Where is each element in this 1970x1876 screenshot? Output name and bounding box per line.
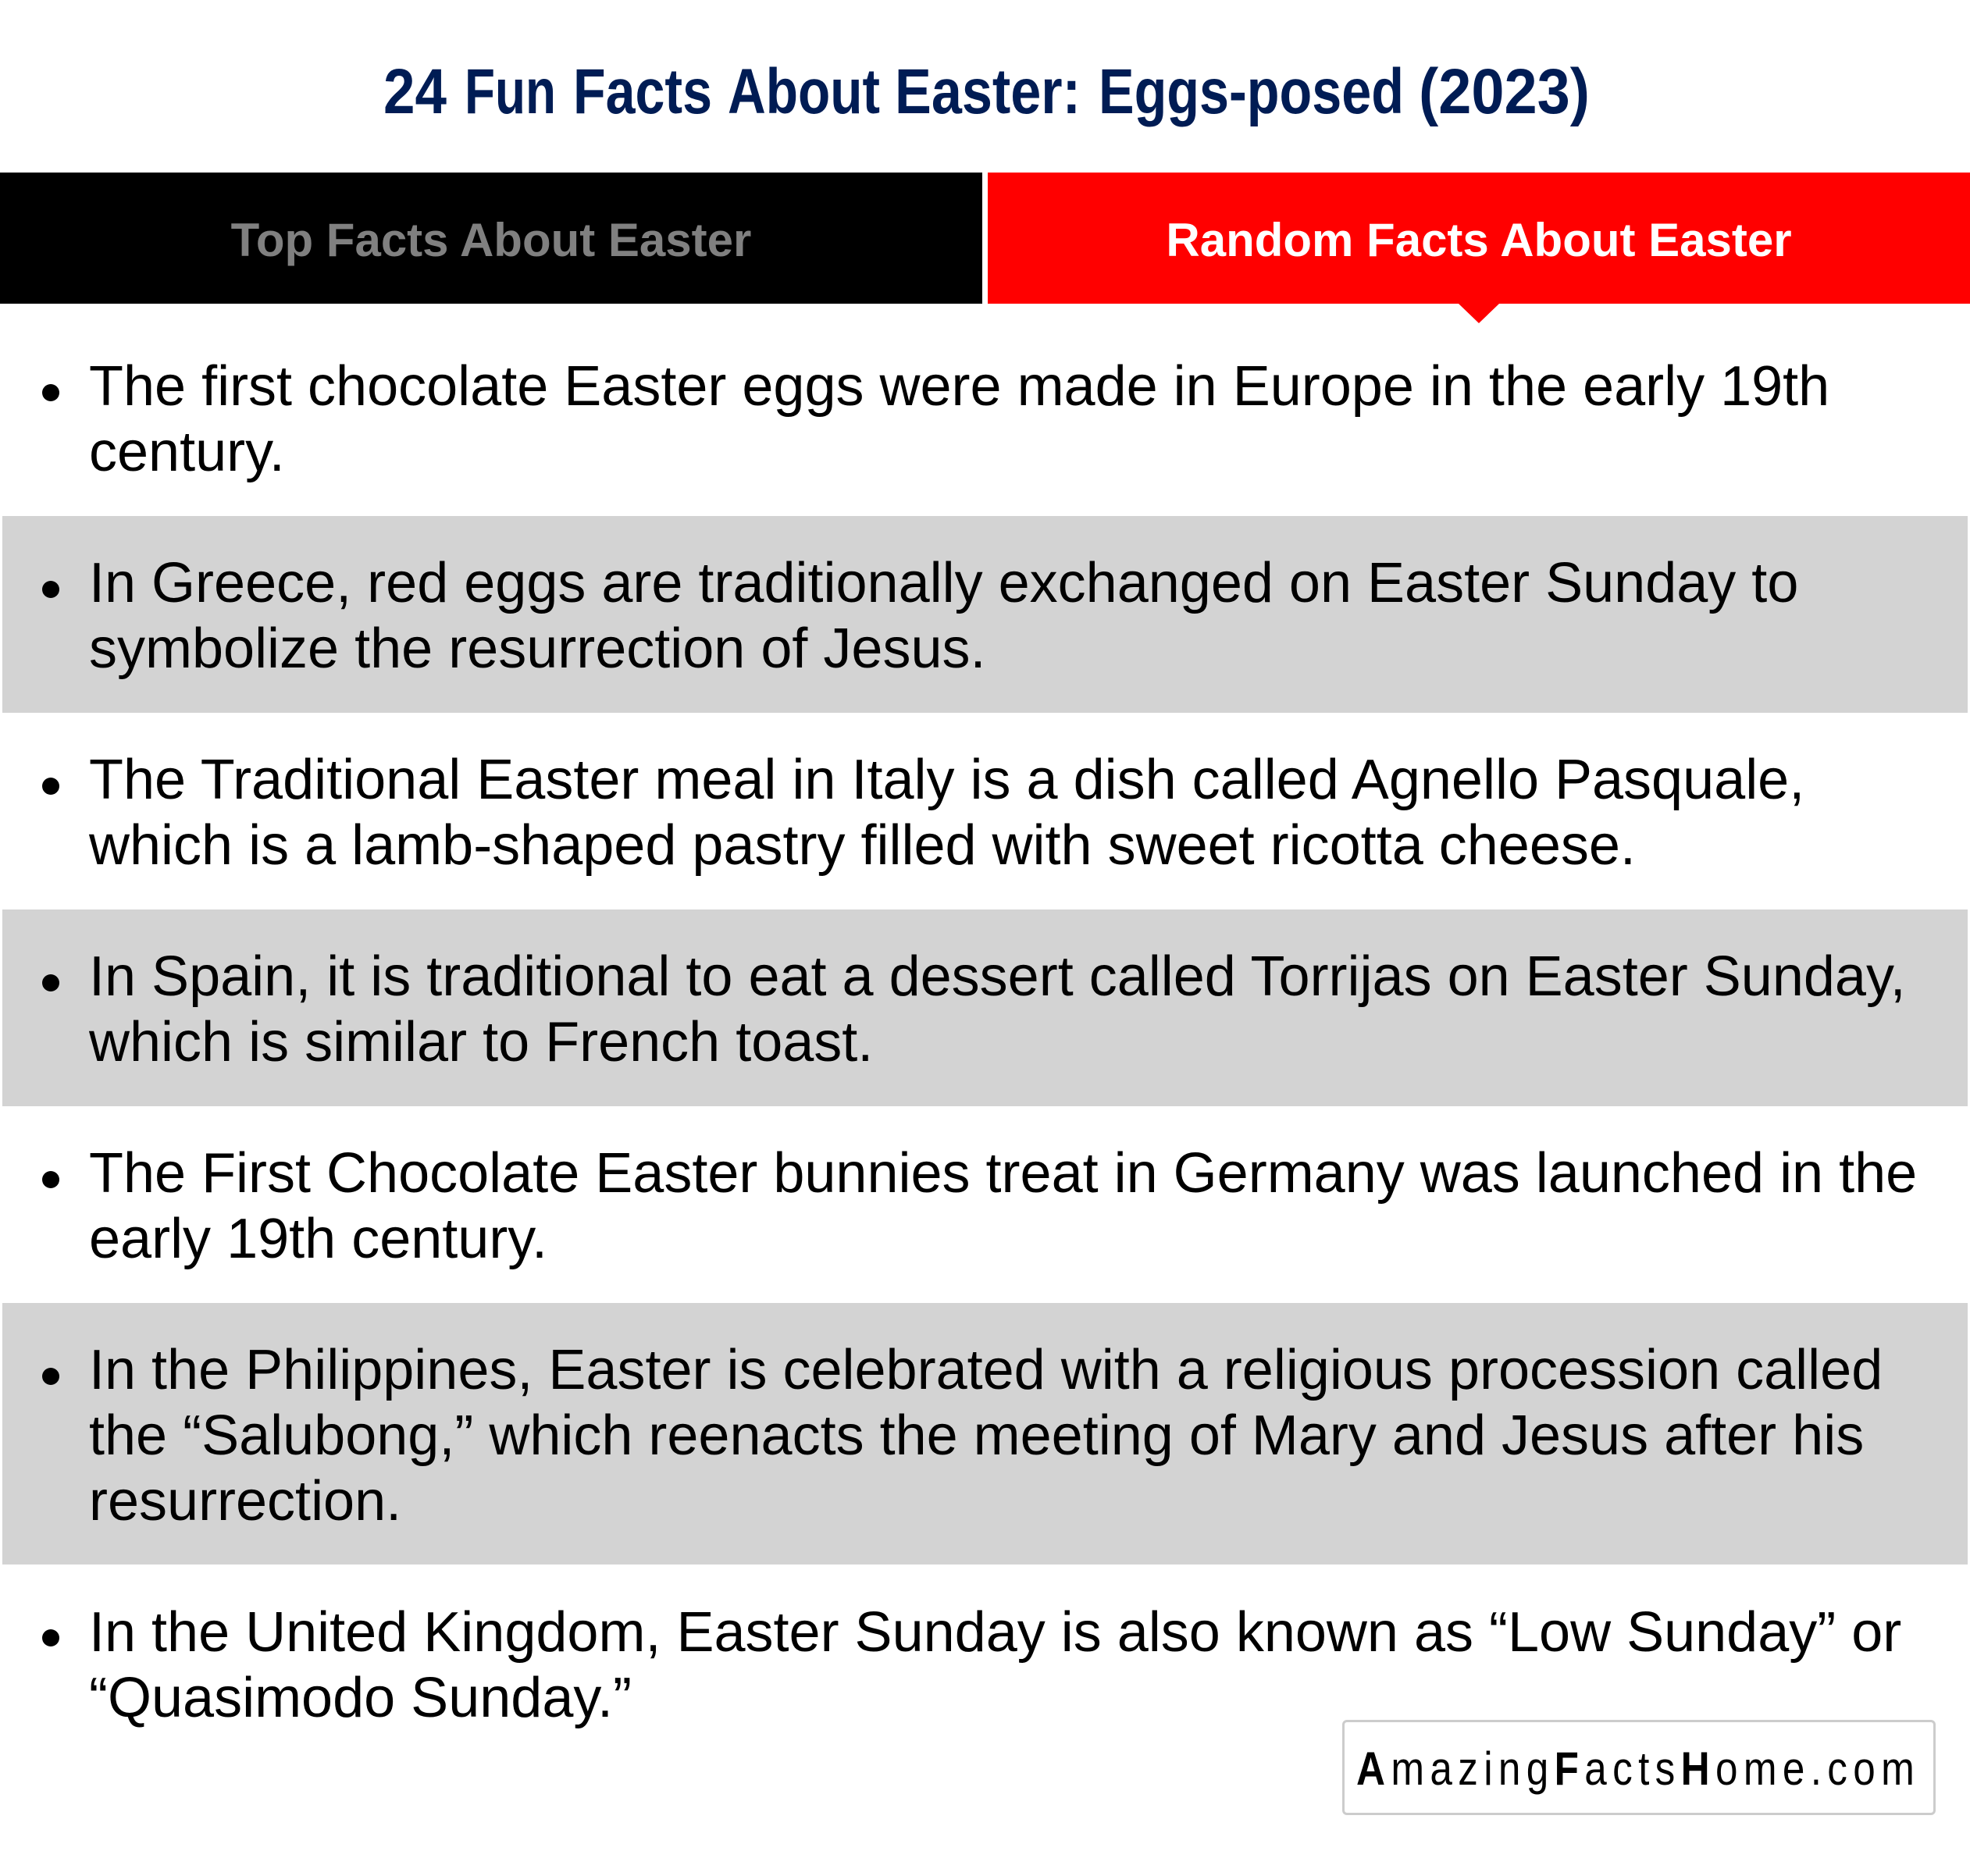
- icon: tab pointer: [1459, 304, 1499, 323]
- title: (2023): [1419, 56, 1590, 127]
- watermark box: [1342, 1720, 1936, 1815]
- fact 2: [2, 516, 1968, 713]
- fact 3: which is a lamb-shaped pastry filled with sweet ricotta cheese.: [89, 814, 1636, 877]
- fact 4: [2, 910, 1968, 1106]
- fact 3: The Traditional Easter meal in Italy is a dish called Agnello Pasquale,: [89, 749, 1804, 811]
- fact 4: In Spain, it is traditional to eat a dessert called Torrijas on Easter Sunday,: [89, 945, 1906, 1008]
- title: Fun: [465, 56, 556, 127]
- watermark box: AmazingFactsHome.com: [1356, 1743, 1920, 1795]
- title: 24: [383, 56, 447, 127]
- title: About: [728, 56, 880, 127]
- fact 1: century.: [89, 421, 285, 483]
- fact 7: In the United Kingdom, Easter Sunday is also known as “Low Sunday” or: [89, 1601, 1901, 1664]
- fact 5: early 19th century.: [89, 1208, 547, 1270]
- fact 6: the “Salubong,” which reenacts the meeting of Mary and Jesus after his: [89, 1404, 1864, 1467]
- fact 2: In Greece, red eggs are traditionally exchanged on Easter Sunday to: [89, 552, 1798, 614]
- fact 3: [42, 749, 1804, 877]
- fact 2: symbolize the resurrection of Jesus.: [89, 618, 985, 680]
- fact 7: [42, 1601, 1901, 1729]
- fact 1: The first chocolate Easter eggs were made in Europe in the early 19th: [89, 355, 1829, 418]
- tab: random facts: [988, 173, 1970, 304]
- fact 6: In the Philippines, Easter is celebrated with a religious procession called: [89, 1339, 1883, 1401]
- fact 5: The First Chocolate Easter bunnies treat in Germany was launched in the: [89, 1142, 1917, 1205]
- title: Easter:: [895, 56, 1081, 127]
- fact 7: “Quasimodo Sunday.”: [89, 1667, 632, 1729]
- title: Eggs-posed: [1099, 56, 1404, 127]
- tab: top facts: Top Facts About Easter: [231, 214, 751, 266]
- title: Facts: [573, 56, 712, 127]
- fact 6: [2, 1303, 1968, 1565]
- tab: random facts: Random Facts About Easter: [1166, 214, 1792, 266]
- fact 1: [42, 355, 1829, 483]
- fact 5: [42, 1142, 1917, 1270]
- fact 6: resurrection.: [89, 1470, 401, 1532]
- fact 4: which is similar to French toast.: [89, 1011, 873, 1073]
- title: [383, 56, 1590, 127]
- tab: top facts: [0, 173, 982, 304]
